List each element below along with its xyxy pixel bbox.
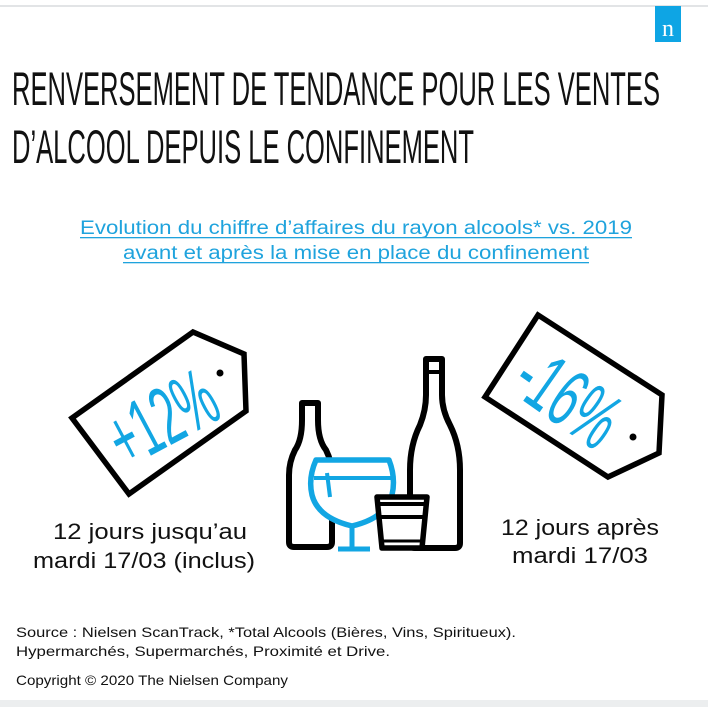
subtitle	[80, 218, 632, 264]
label: after: mardi 17/03	[512, 543, 648, 568]
subtitle: Evolution du chiffre d’affaires du rayon alcools* vs. 2019	[80, 218, 632, 239]
title	[12, 62, 660, 173]
label: after	[501, 515, 659, 568]
icon: bottles and glasses	[289, 359, 460, 549]
price tag: -16%: -16%	[497, 330, 638, 467]
source text	[16, 624, 516, 688]
label: after: 12 jours après	[501, 515, 659, 540]
logo: nielsen	[655, 6, 681, 42]
source text: Hypermarchés, Supermarchés, Proximité et Drive.	[16, 643, 390, 659]
logo: nielsen: n	[662, 16, 674, 42]
label: before: 12 jours jusqu’au	[53, 519, 247, 544]
price tag: -16%	[485, 315, 662, 477]
subtitle: avant et après la mise en place du confinement	[123, 243, 590, 264]
label: before	[33, 519, 255, 573]
price tag: +12%: +12%	[91, 352, 233, 485]
price tag: +12%	[72, 332, 246, 494]
label: before: mardi 17/03 (inclus)	[33, 548, 255, 573]
source text: Copyright © 2020 The Nielsen Company	[16, 672, 288, 688]
source text: Source : Nielsen ScanTrack, *Total Alcools (Bières, Vins, Spiritueux).	[16, 624, 516, 640]
